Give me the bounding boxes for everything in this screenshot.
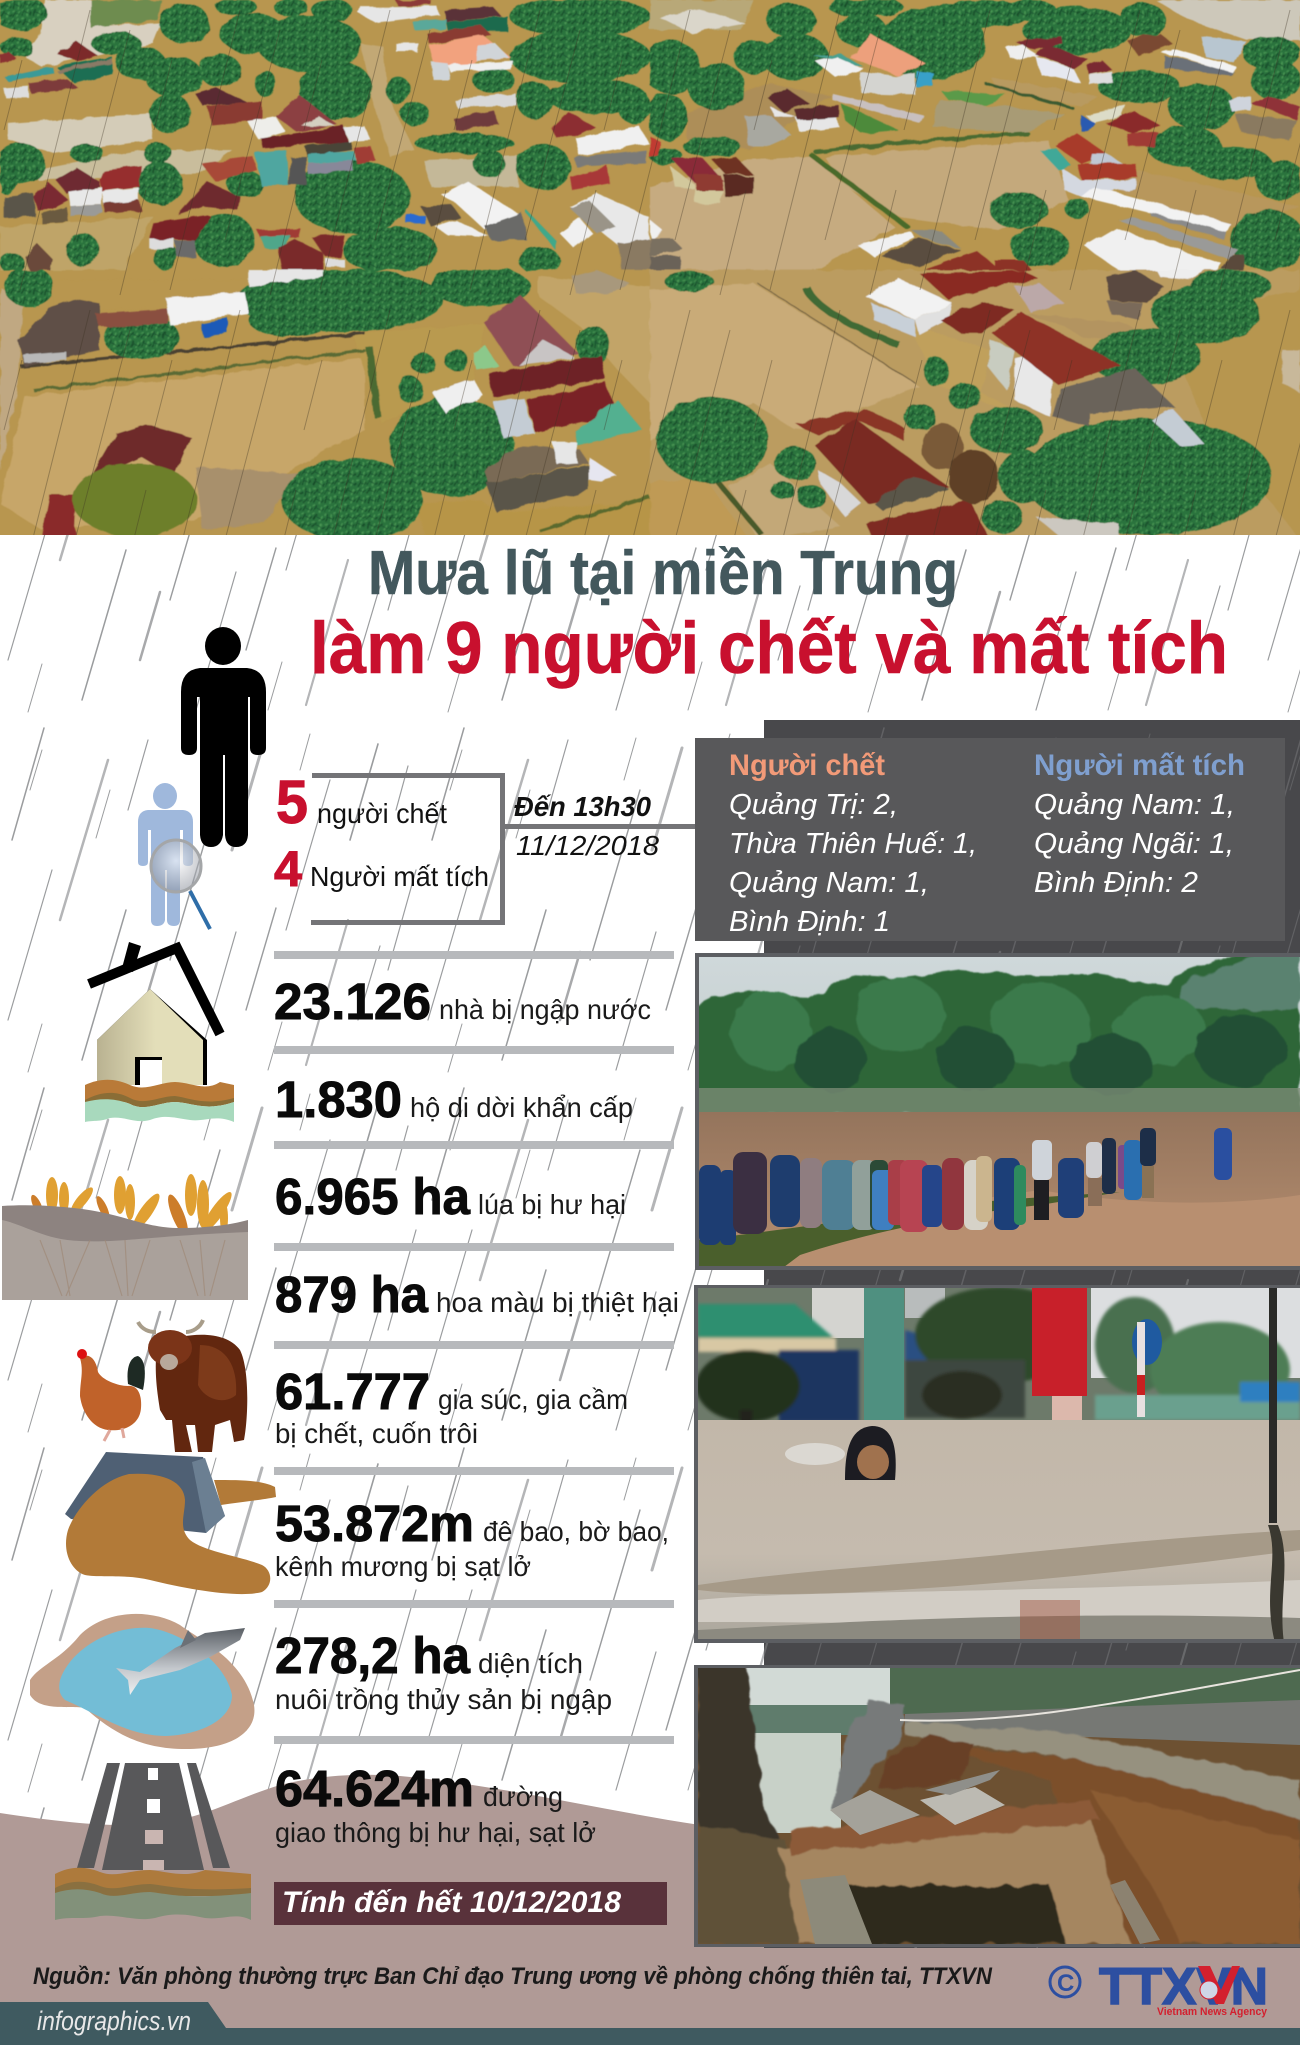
photo: man wading through flooded street — [694, 1285, 1300, 1643]
stat: rice damaged: 6.965 ha — [275, 1168, 471, 1225]
icon: eroded dyke — [65, 1452, 276, 1594]
logo: TTXVN: Vietnam News Agency — [1157, 2006, 1268, 2018]
date label: 11/12/2018 — [516, 830, 659, 861]
stat: rice damaged — [275, 1168, 626, 1225]
rule dividers — [274, 951, 674, 1744]
logo: TTXVN: TTXVN — [1099, 1958, 1268, 2016]
panel: casualties by province: Quảng Nam: 1, — [1034, 789, 1235, 821]
ground shape — [0, 1775, 1300, 2045]
stat rows — [274, 973, 679, 1848]
date box: Tính đến hết 10/12/2018 — [282, 1886, 621, 1919]
date label: Đến 13h30 — [514, 791, 651, 822]
stat: crops damaged: hoa màu bị thiệt hại — [436, 1287, 679, 1318]
stat: aquaculture — [275, 1627, 612, 1715]
footer bar: infographics.vn — [37, 2006, 191, 2036]
title — [310, 539, 1228, 689]
stat: dead and missing: 5 — [276, 768, 308, 836]
title: làm 9 người chết và mất tích — [310, 608, 1228, 689]
stat: households relocated: hộ di dời khẩn cấp — [410, 1092, 633, 1123]
footer bar — [0, 2002, 1300, 2045]
stat: livestock: bị chết, cuốn trôi — [275, 1418, 478, 1449]
date label — [514, 791, 659, 861]
stat: livestock: 61.777 — [275, 1363, 430, 1420]
icon: damaged rice field — [2, 1174, 248, 1300]
date box — [274, 1882, 667, 1925]
panel: casualties by province: Quảng Nam: 1, — [729, 867, 929, 899]
stat: households relocated: 1.830 — [275, 1071, 402, 1128]
magnifier — [151, 840, 210, 929]
stat: dead and missing: 4 — [274, 841, 302, 897]
panel: casualties by province: Người mất tích — [1034, 749, 1245, 782]
stat: roads: giao thông bị hư hại, sạt lở — [275, 1817, 596, 1848]
stat: dead and missing: người chết — [317, 798, 447, 829]
stat: houses flooded: nhà bị ngập nước — [439, 994, 651, 1025]
icon: buffalo — [138, 1320, 247, 1452]
hero photo: flooded village — [0, 0, 1300, 542]
stat: aquaculture: diện tích — [478, 1648, 583, 1679]
panel: casualties by province: Bình Định: 2 — [1034, 867, 1198, 899]
stat: dead and missing: Người mất tích — [310, 861, 489, 892]
source line: Nguồn: Văn phòng thường trực Ban Chỉ đạo Trung ương về phòng chống thiên tai, TTXVN — [33, 1963, 993, 1990]
panel: casualties by province: Quảng Trị: 2, — [729, 789, 898, 821]
photo: collapsed road and concrete — [694, 1665, 1300, 1947]
back dark panel — [764, 720, 1300, 1948]
logo: TTXVN: C — [1057, 1970, 1074, 1997]
panel: casualties by province — [695, 738, 1285, 941]
background rain — [0, 535, 1300, 1865]
stat: roads — [275, 1760, 596, 1848]
stat: livestock — [275, 1363, 628, 1449]
people in raincoats — [699, 1128, 1232, 1245]
stat: dykes: đê bao, bờ bao, — [483, 1516, 669, 1547]
panel: casualties by province: Quảng Ngãi: 1, — [1034, 828, 1234, 860]
stat: rice damaged: lúa bị hư hại — [478, 1189, 626, 1220]
icon: missing person with magnifier — [138, 783, 210, 929]
stat: dead and missing — [274, 768, 489, 897]
icon: hen — [77, 1349, 145, 1441]
stat: aquaculture: nuôi trồng thủy sản bị ngập — [275, 1684, 612, 1715]
title: Mưa lũ tại miền Trung — [368, 539, 958, 608]
icon: road — [55, 1763, 251, 1920]
stat: houses flooded — [274, 973, 651, 1030]
stat: dykes — [275, 1495, 669, 1582]
stat: crops damaged — [275, 1266, 679, 1323]
stat: households relocated — [275, 1071, 633, 1128]
panel: casualties by province: Người chết — [729, 749, 885, 782]
icon: aquaculture pond with fish — [30, 1614, 254, 1749]
stat: crops damaged: 879 ha — [275, 1266, 429, 1323]
panel: casualties by province: Thừa Thiên Huế: 1, — [729, 828, 977, 860]
bracket connector — [311, 773, 696, 925]
stat: roads: đường — [483, 1781, 563, 1812]
stat: houses flooded: 23.126 — [274, 973, 431, 1030]
photo: crowd in raincoats by flood — [690, 945, 1300, 1270]
stat: roads: 64.624m — [275, 1760, 474, 1817]
stat: aquaculture: 278,2 ha — [275, 1627, 471, 1684]
stat: dykes: 53.872m — [275, 1495, 474, 1552]
panel: casualties by province: Bình Định: 1 — [729, 906, 890, 938]
stat: dykes: kênh mương bị sạt lở — [275, 1551, 531, 1582]
man — [845, 1426, 896, 1480]
icon: flooded house — [85, 942, 234, 1122]
stat: livestock: gia súc, gia cầm — [438, 1384, 628, 1415]
icon: black person — [181, 627, 266, 847]
